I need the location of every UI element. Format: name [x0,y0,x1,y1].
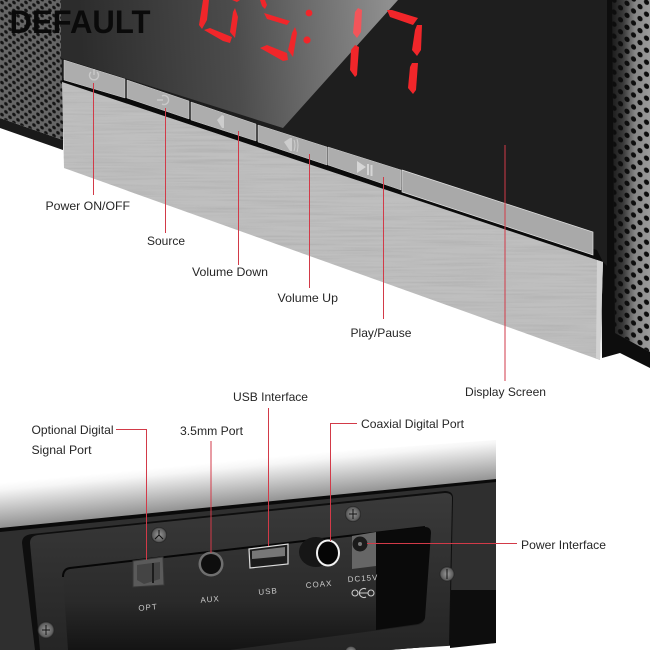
port: aux [198,552,224,576]
callout labels: Volume Up [278,291,338,305]
callout labels: Optional Digital [32,423,114,437]
clock digits 05:17 [199,0,422,94]
icon: dc polarity [352,588,374,597]
port labels: COAX [305,579,333,590]
upper body gradient [0,440,496,530]
plate cutout [63,527,431,650]
port labels: USB [258,586,278,597]
leader lines [94,83,517,560]
callout labels: Display Screen [465,385,546,399]
port labels: DC15V [347,573,379,584]
callout labels: 3.5mm Port [180,424,244,438]
port labels [138,573,379,613]
display screen [61,0,607,266]
port: coax [299,537,339,567]
button: display [402,170,593,255]
button: power [64,60,125,98]
button: source [127,80,189,119]
port: dc power [352,532,376,569]
port labels: AUX [200,594,220,605]
callout labels [32,199,606,552]
callout labels: Play/Pause [350,326,412,340]
port: optical [133,557,164,587]
panel: soundbar top view [0,0,650,368]
button strip [64,60,593,255]
port: usb [249,544,288,568]
brushed metal plate [62,82,603,360]
panel: soundbar rear ports [0,440,496,650]
black channel below buttons [62,78,603,262]
watermark: DEFAULT [10,4,151,40]
callout labels: Power Interface [521,538,606,552]
button: volume up [258,125,327,165]
rear body [0,479,496,650]
callout labels: Source [147,234,185,248]
callout labels: Signal Port [32,443,92,457]
right speaker grille [600,0,650,368]
callout labels: Power ON/OFF [46,199,130,213]
callout labels: Coaxial Digital Port [361,417,465,431]
port labels: OPT [138,602,158,613]
button: volume down [191,102,256,141]
port plate [22,491,453,650]
callout labels: USB Interface [233,390,308,404]
button: play pause [328,147,401,190]
left speaker grille [0,0,63,150]
screws [38,506,454,650]
callout labels: Volume Down [192,265,268,279]
